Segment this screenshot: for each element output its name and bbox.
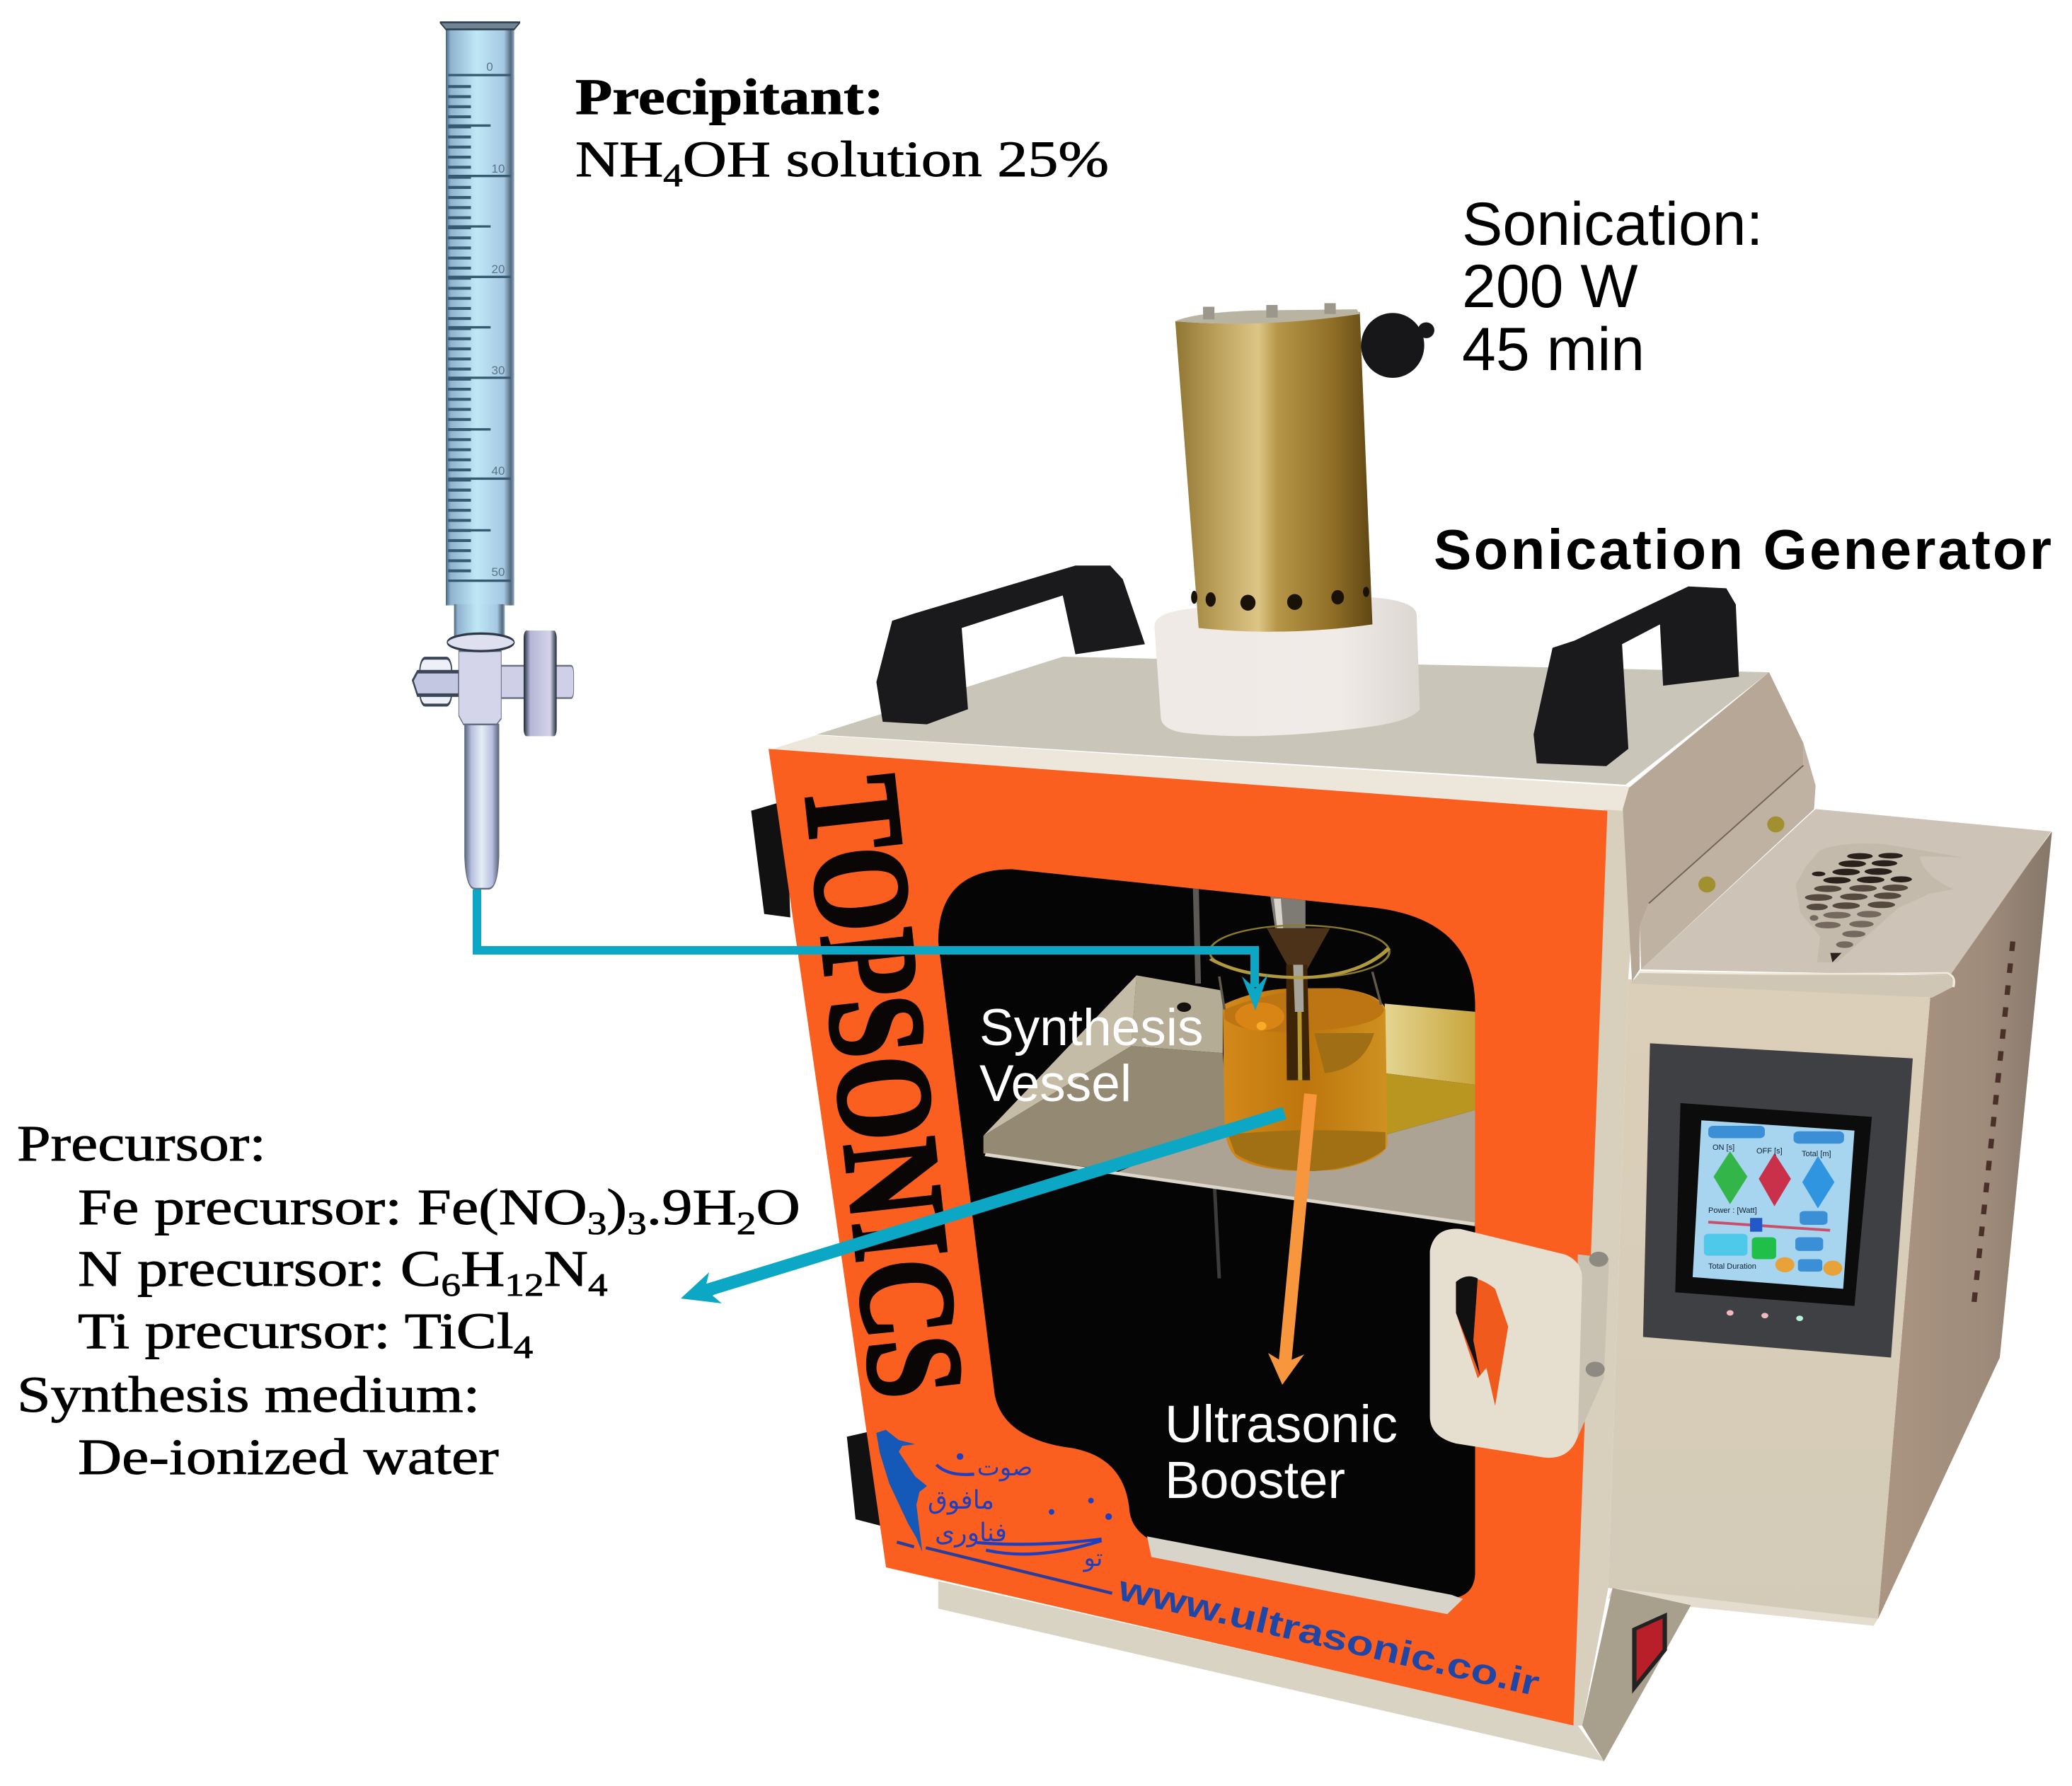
burette scale numbers: 30 — [492, 364, 505, 377]
precursor label: .9H — [647, 1180, 737, 1235]
arrow: precipitant feed — [477, 889, 1268, 1010]
touch screen labels — [1708, 1143, 1831, 1271]
precursor label: 3 — [627, 1205, 647, 1241]
precursor label — [17, 1115, 800, 1485]
precursor label: O — [756, 1180, 800, 1235]
shelf — [984, 975, 1476, 1226]
calligraphic swashes — [936, 1465, 1102, 1554]
power switch — [1635, 1615, 1665, 1688]
precursor label: Synthesis medium: — [17, 1366, 480, 1423]
beaker — [1210, 897, 1389, 1171]
side latches — [751, 800, 882, 1526]
synthesis vessel label: Synthesis — [979, 999, 1203, 1056]
burette scale numbers — [486, 60, 505, 579]
burette scale numbers: 50 — [492, 565, 505, 579]
sonotrode probe — [1270, 897, 1306, 932]
window opening — [938, 869, 1475, 1598]
touch screen labels: Total Duration — [1708, 1262, 1756, 1271]
touch screen labels: Power : [Watt] — [1708, 1206, 1757, 1215]
precursor label: 3 — [587, 1205, 606, 1241]
touch screen labels: ON [s] — [1713, 1143, 1734, 1152]
precursor label: 4 — [514, 1329, 533, 1365]
orange door — [769, 749, 1607, 1726]
window interior — [984, 887, 1476, 1279]
vent holes — [1191, 587, 1369, 611]
sonication generator label: Sonication Generator — [1434, 518, 2051, 581]
burette scale numbers: 20 — [492, 263, 505, 276]
right handle — [1533, 587, 1739, 766]
left handle — [876, 565, 1145, 725]
sonication settings label — [1462, 190, 1763, 384]
precursor label: N — [544, 1241, 588, 1297]
door lettering: TOPSONICS: TOPSONICS — [775, 769, 994, 1405]
Persian logo text: تو — [1082, 1544, 1103, 1572]
precursor label: Precursor: — [17, 1115, 266, 1172]
precursor label: De-ionized water — [78, 1429, 499, 1485]
burette scale numbers: 0 — [486, 60, 493, 74]
Persian logo text — [928, 1453, 1103, 1572]
generator upper panels — [1623, 672, 2051, 998]
generator module front — [1608, 979, 1930, 1619]
precursor label: ) — [606, 1180, 627, 1235]
vent — [1796, 843, 1962, 962]
front top strip — [769, 735, 1640, 818]
stopcock — [413, 630, 574, 889]
sonication device — [751, 303, 2052, 1761]
synthesis vessel label — [979, 999, 1203, 1112]
precursor label: H — [461, 1241, 505, 1297]
precursor label: 12 — [505, 1267, 544, 1303]
ultrasonic booster label: Ultrasonic — [1165, 1395, 1398, 1453]
precipitant label — [575, 69, 1109, 193]
top bolts — [1203, 303, 1336, 319]
burette scale numbers: 40 — [492, 464, 505, 478]
logo artwork — [876, 1430, 1112, 1594]
precipitant label: Precipitant: — [575, 69, 884, 125]
ultrasonic booster label — [1165, 1395, 1398, 1509]
brass cylinder — [1175, 312, 1372, 632]
door hardware and panel — [1430, 1043, 1913, 1458]
Persian logo text: فناوری — [935, 1519, 1007, 1548]
cabinet and generator body — [751, 735, 2052, 1761]
precursor label: 6 — [441, 1267, 461, 1303]
generator module top — [1641, 809, 2051, 975]
ultrasonic booster label: Booster — [1165, 1451, 1345, 1509]
yellow back plate — [1385, 1003, 1476, 1085]
precursor label: 2 — [737, 1205, 756, 1241]
precursor label: Ti precursor: TiCl — [78, 1303, 514, 1359]
sonication settings label: 45 min — [1462, 316, 1645, 384]
door edge strip — [1573, 810, 1640, 1726]
synthesis vessel label: Vessel — [979, 1055, 1132, 1112]
precipitant label: OH solution 25% — [683, 131, 1109, 188]
blue bird logo — [876, 1430, 927, 1552]
control panel — [1643, 1043, 1913, 1358]
bottom lip — [1147, 1536, 1463, 1614]
hinge screws — [1698, 817, 1785, 892]
touch screen labels: Total [m] — [1802, 1150, 1831, 1158]
sonication settings label: Sonication: — [1462, 190, 1763, 258]
cabinet top surface — [817, 657, 1769, 785]
arrow: precursor feed — [681, 1113, 1284, 1303]
precursor label: Fe precursor: Fe(NO — [78, 1180, 587, 1235]
precipitant label: 4 — [663, 157, 683, 193]
touch screen — [1693, 1120, 1855, 1289]
generator module side — [1878, 831, 2052, 1619]
burette scale numbers: 10 — [492, 162, 505, 175]
handle clip — [1430, 1229, 1609, 1458]
sonication settings label: 200 W — [1462, 253, 1638, 321]
touch screen labels: OFF [s] — [1756, 1147, 1783, 1156]
precipitant label: NH — [575, 131, 663, 188]
lower body — [1582, 1588, 1691, 1761]
precursor label: 4 — [588, 1267, 608, 1303]
vertical rods — [1193, 887, 1201, 984]
Persian logo text: مافوق — [928, 1486, 994, 1515]
glass rim — [1210, 926, 1389, 978]
ultrasonic horn — [876, 303, 1739, 766]
Persian logo text: صوت — [977, 1453, 1032, 1482]
precursor label: N precursor: C — [78, 1241, 441, 1297]
black connector — [1361, 313, 1434, 378]
arrow: ultrasonic booster — [1268, 1094, 1311, 1385]
burette — [413, 23, 574, 889]
website url: www.ultrasonic.co.ir — [1114, 1568, 1543, 1703]
white collar — [1154, 597, 1420, 736]
burette glass tube — [413, 23, 574, 889]
